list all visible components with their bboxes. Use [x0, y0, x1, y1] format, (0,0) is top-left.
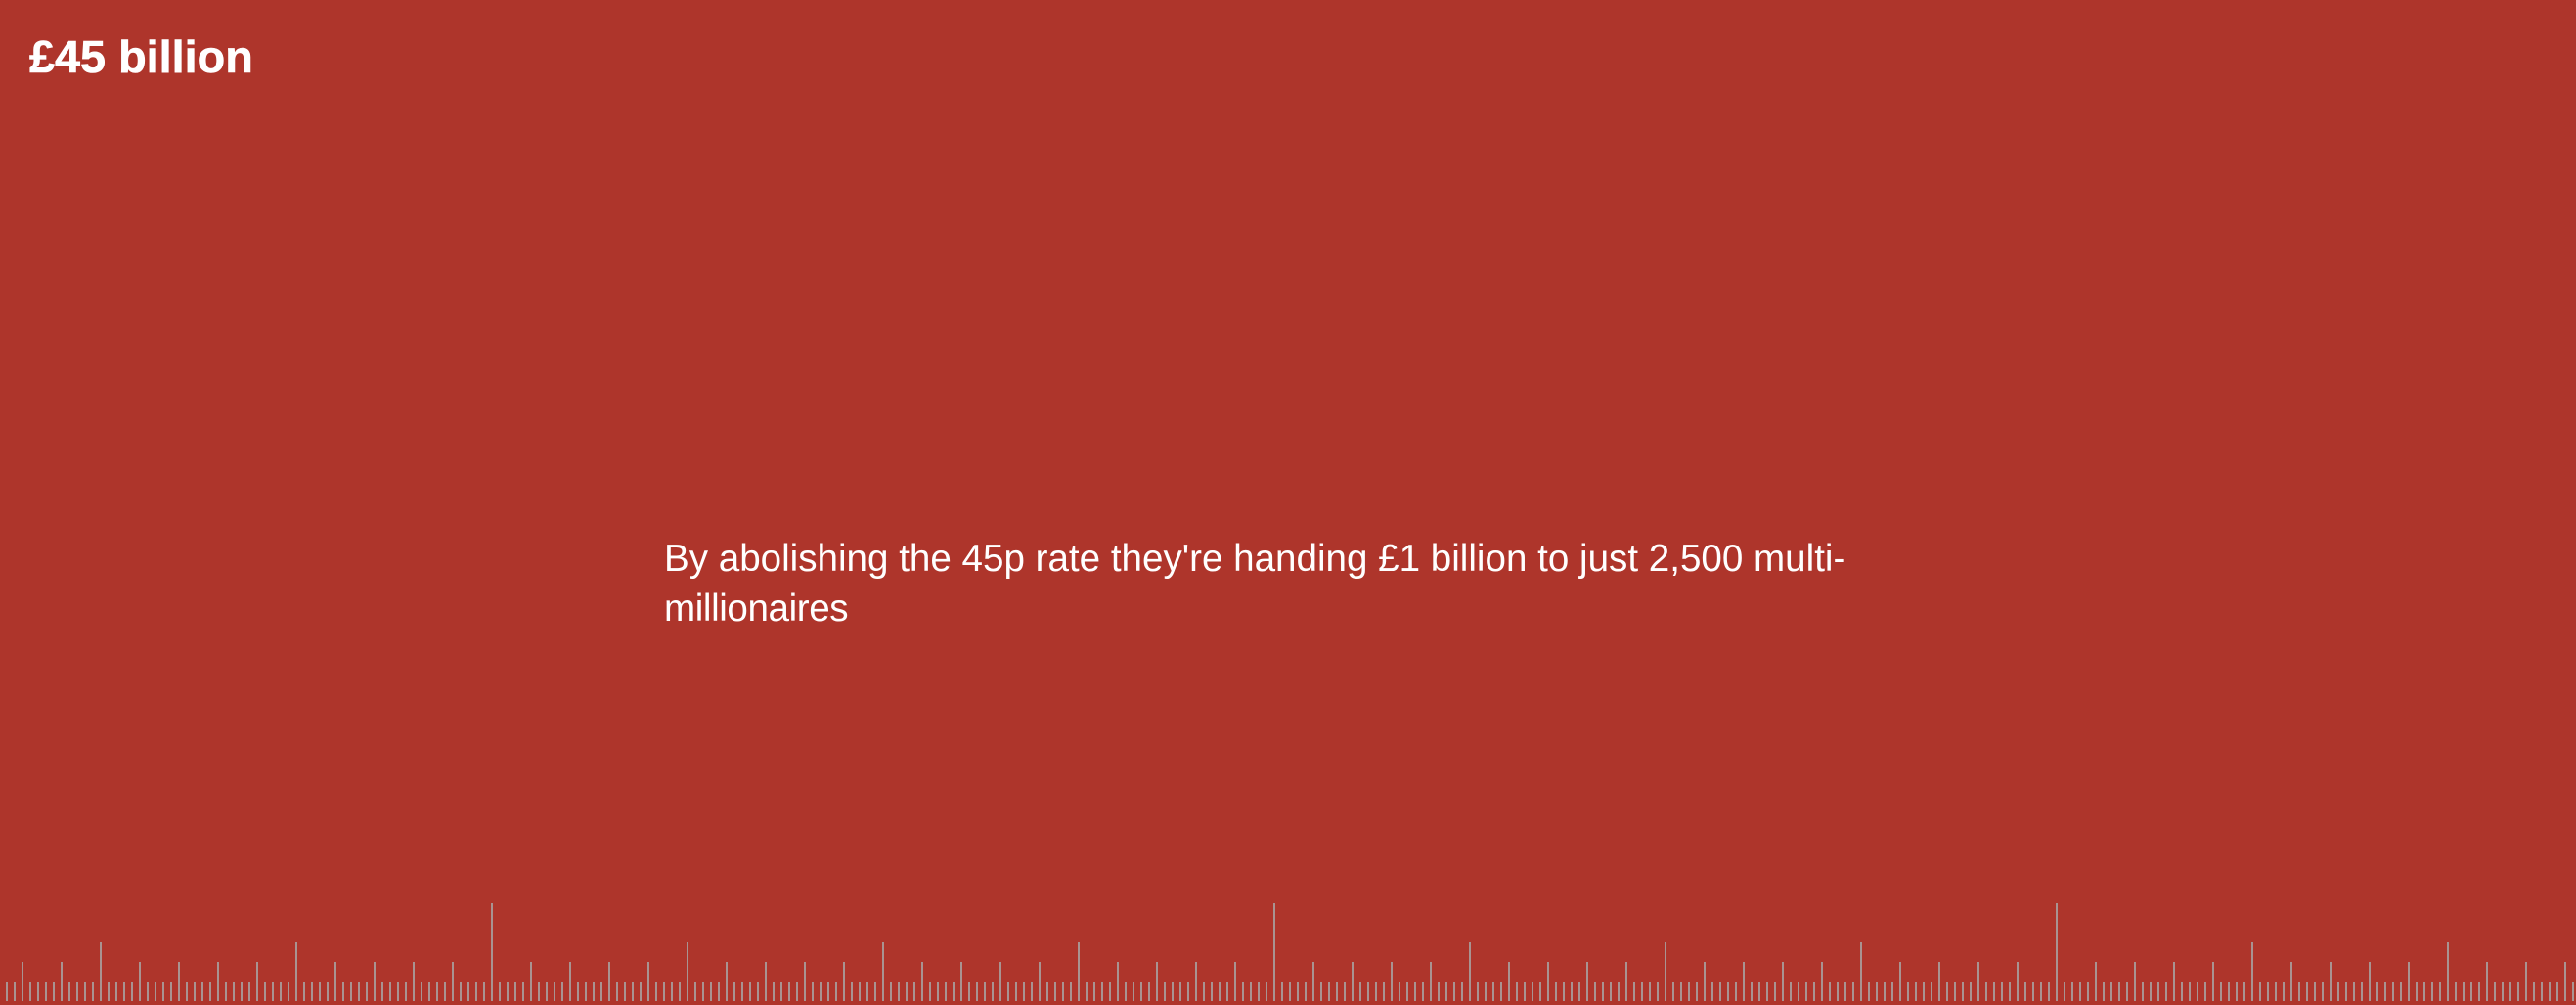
chart: ruler scale of tick marks — [6, 903, 2574, 1001]
text block: 45p rate statement: millionaires — [664, 588, 848, 630]
title: £45 billion: £45 billion — [29, 31, 253, 82]
text block: 45p rate statement — [664, 538, 1845, 630]
text block: 45p rate statement: By abolishing the 45p rate they're handing £1 billion to just 2,500 multi- — [664, 538, 1845, 580]
